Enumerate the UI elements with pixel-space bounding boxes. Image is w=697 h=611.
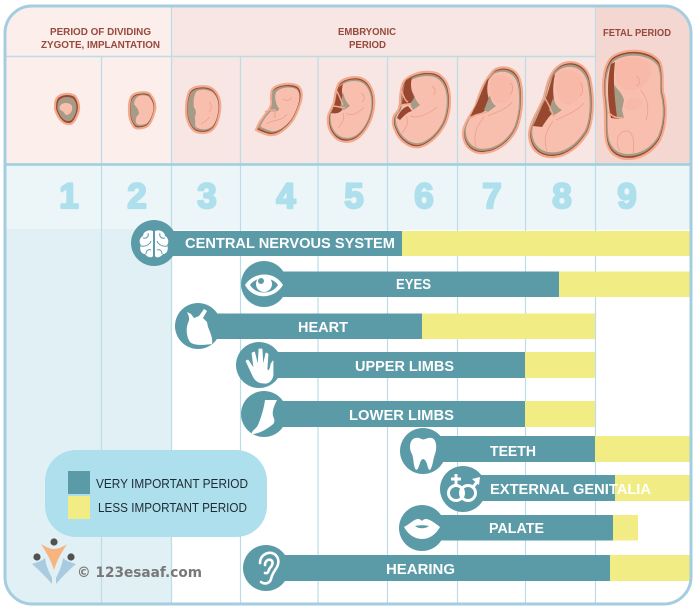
month numbers row: 9 xyxy=(617,177,637,216)
legend label: very important: VERY IMPORTANT PERIOD xyxy=(96,477,248,491)
legend label: less important: LESS IMPORTANT PERIOD xyxy=(98,501,247,515)
icon: hand xyxy=(246,349,273,383)
icon: foot xyxy=(252,400,277,434)
bar: heart: HEART xyxy=(298,320,348,336)
header: embryonic period: PERIOD xyxy=(349,39,386,51)
wedge: placenta and amniotic gap xyxy=(533,74,556,127)
wedge: placenta and amniotic gap xyxy=(331,84,345,113)
bar: hearing xyxy=(243,545,691,591)
bar: heart xyxy=(175,303,595,349)
bar: lower limbs: LOWER LIMBS xyxy=(349,408,454,424)
legend swatch: very important xyxy=(68,471,90,494)
month numbers row: 4 xyxy=(276,177,296,216)
header: embryonic period xyxy=(338,26,396,51)
embryo week 3 xyxy=(186,86,220,133)
bar: external genitalia: EXTERNAL GENITALIA xyxy=(490,482,652,498)
month numbers row xyxy=(59,177,637,216)
bar: teeth xyxy=(400,428,691,474)
bar: palate: PALATE xyxy=(489,521,544,537)
embryo week 6 xyxy=(393,72,450,147)
icon: heart xyxy=(187,309,212,345)
embryo week 7 xyxy=(463,67,522,153)
month numbers row: 7 xyxy=(482,177,502,216)
embryo illustrations row xyxy=(55,51,666,159)
embryo week 4 xyxy=(256,84,302,135)
bar: central nervous system: CENTRAL NERVOUS SYSTEM xyxy=(185,236,395,252)
bar: external genitalia xyxy=(440,466,691,512)
bar: upper limbs: UPPER LIMBS xyxy=(355,359,454,375)
embryo week 9 xyxy=(603,51,666,159)
bar: teeth: TEETH xyxy=(490,444,536,460)
embryo week 5 xyxy=(328,77,374,142)
icon: ear xyxy=(260,553,278,583)
month numbers row: 2 xyxy=(127,177,147,216)
wedge: placenta and amniotic gap xyxy=(608,62,619,119)
logo: 123esaaf xyxy=(32,538,76,584)
wedge: placenta and amniotic gap xyxy=(402,77,415,104)
bar: central nervous system xyxy=(131,220,691,266)
icon: gender symbols xyxy=(448,474,480,500)
month numbers row: 1 xyxy=(59,177,79,216)
month numbers row: 3 xyxy=(197,177,217,216)
header: period of dividing zygote, implantation: ZYGOTE, IMPLANTATION xyxy=(41,39,160,51)
month numbers row: 6 xyxy=(414,177,434,216)
bar: eyes xyxy=(241,261,691,307)
legend xyxy=(45,450,267,537)
bar: hearing: HEARING xyxy=(386,562,455,578)
header: period of dividing zygote, implantation xyxy=(41,26,160,51)
embryo week 1 xyxy=(55,94,79,124)
bar: palate xyxy=(399,505,638,551)
header: period of dividing zygote, implantation: PERIOD OF DIVIDING xyxy=(50,26,151,38)
embryo week 2 xyxy=(129,92,155,128)
icon: tooth xyxy=(410,438,436,470)
bar: eyes: EYES xyxy=(396,277,431,293)
month numbers row: 5 xyxy=(344,177,364,216)
legend swatch: less important xyxy=(68,496,90,519)
icon: lips xyxy=(404,519,440,539)
icon: eye xyxy=(245,274,283,296)
month numbers row: 8 xyxy=(552,177,572,216)
wedge: placenta and amniotic gap xyxy=(469,78,491,119)
header: fetal period: FETAL PERIOD xyxy=(603,27,671,39)
watermark: copyright: © 123esaaf.com xyxy=(77,565,202,581)
embryo week 8 xyxy=(529,62,593,157)
bar: upper limbs xyxy=(236,342,595,388)
header: embryonic period: EMBRYONIC xyxy=(338,26,396,38)
icon: brain xyxy=(140,230,168,257)
bar: lower limbs xyxy=(241,391,595,437)
